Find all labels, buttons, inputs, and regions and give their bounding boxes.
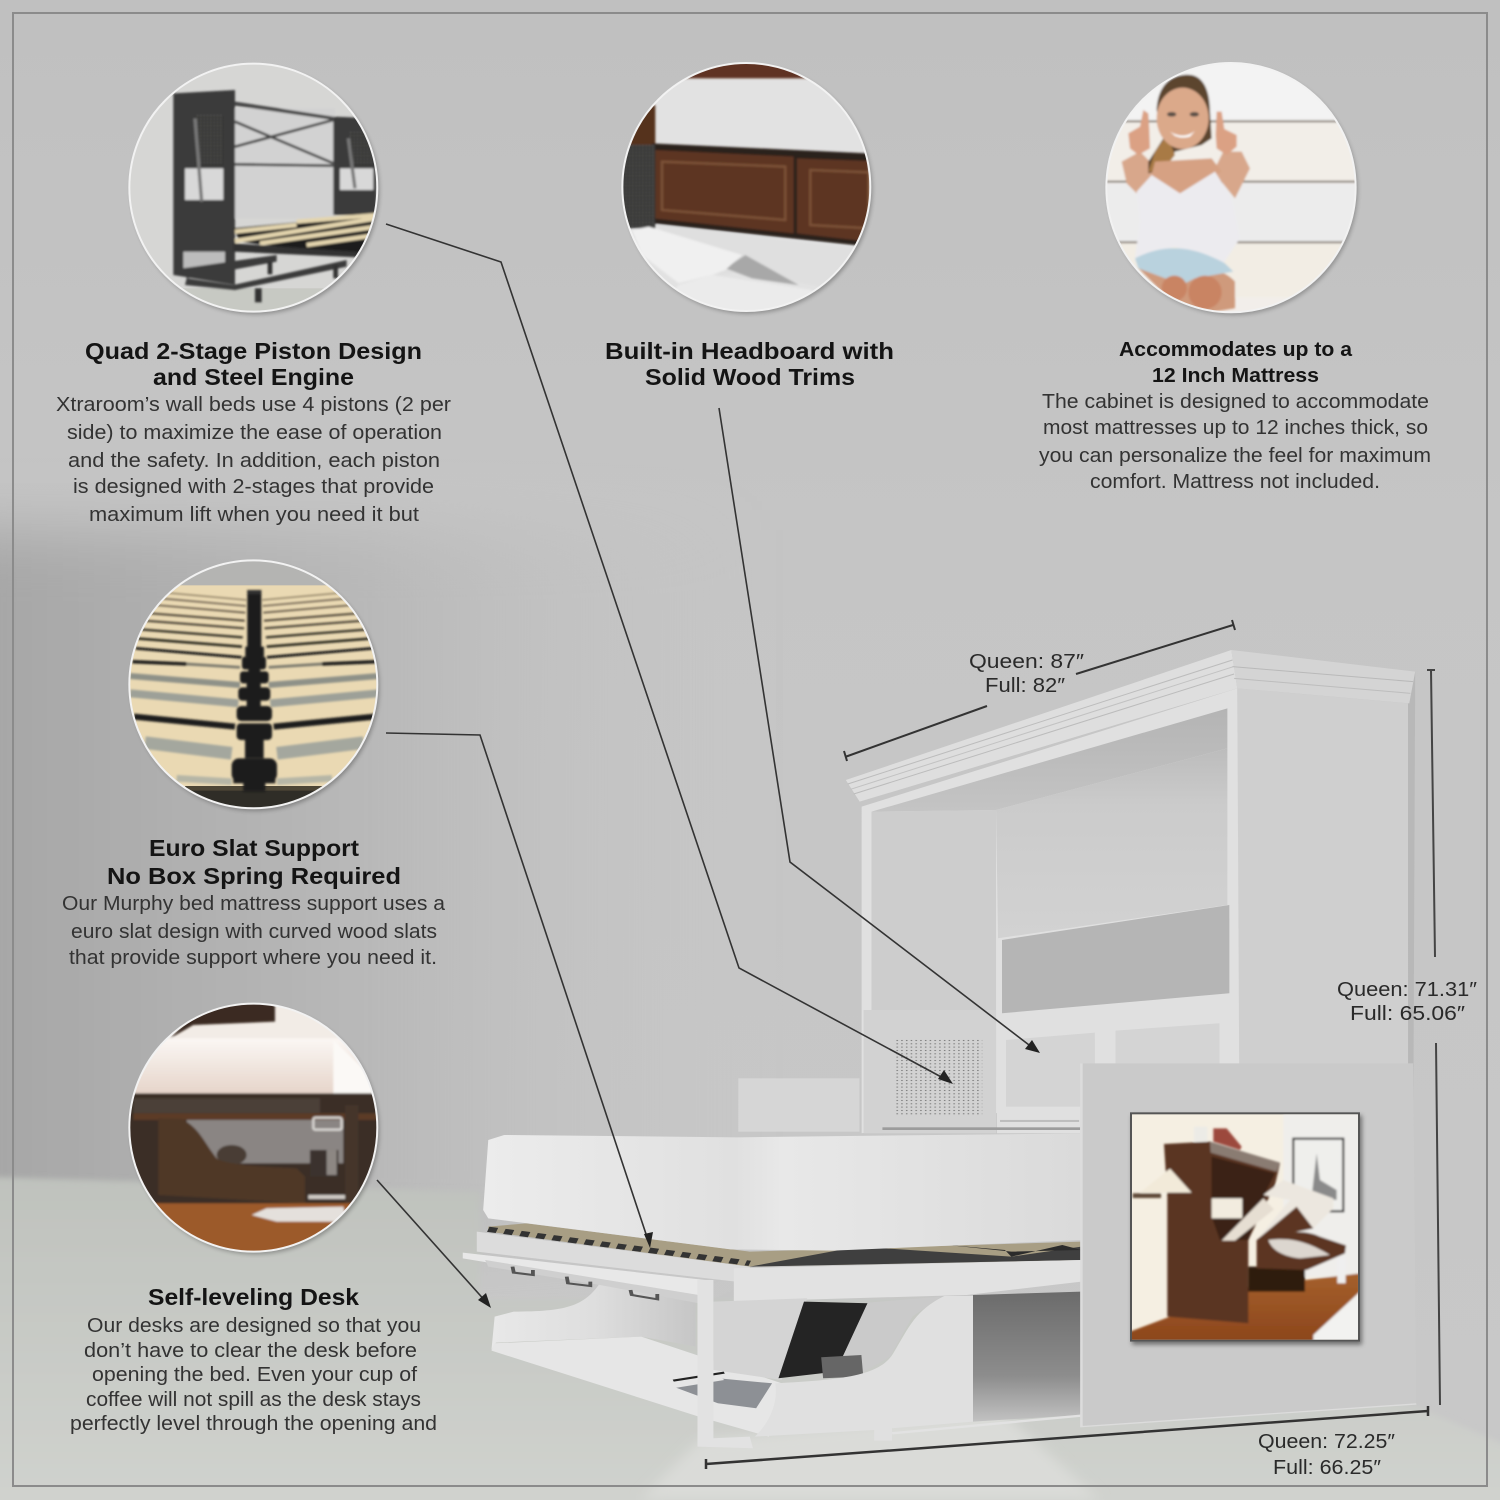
heading: desk: Self-leveling Desk bbox=[148, 1284, 359, 1310]
desk shelf bbox=[491, 1337, 782, 1437]
circle photo: steel engine bbox=[128, 62, 382, 316]
crown moulding bbox=[846, 650, 1237, 802]
text: mattress description: most mattresses up to 12 inches thick, so bbox=[1043, 417, 1428, 439]
feet bbox=[1162, 276, 1187, 301]
dimension label: width bbox=[969, 651, 1084, 697]
text: desk description: opening the bed. Even your cup of bbox=[92, 1364, 417, 1386]
illustration: murphy bed cabinet bbox=[846, 650, 1415, 1143]
circle photo: woman with thumbs up bbox=[1105, 62, 1360, 317]
dimension label: width: Queen: 87″ bbox=[969, 651, 1084, 673]
text: desk description: coffee will not spill as the desk stays bbox=[86, 1389, 421, 1411]
heading: headboard: Built-in Headboard with bbox=[605, 338, 894, 364]
desk near end panel bbox=[755, 1296, 973, 1441]
hands bbox=[1128, 110, 1150, 155]
mattress bbox=[483, 1133, 1081, 1251]
picture frame bbox=[1293, 1139, 1343, 1211]
illustration: bed, mattress and desk bbox=[463, 1063, 1416, 1448]
text: piston description: is designed with 2-stages that provide bbox=[73, 476, 434, 498]
dimension label: depth: Full: 66.25″ bbox=[1273, 1457, 1381, 1479]
heading: piston design: Quad 2-Stage Piston Design bbox=[85, 338, 422, 364]
laptop screen bbox=[778, 1302, 868, 1378]
leader line: headboard to cabinet bbox=[719, 408, 1040, 1053]
perforated panel bbox=[895, 1038, 982, 1115]
front rail bbox=[734, 1260, 1081, 1302]
heading: euro slat: No Box Spring Required bbox=[107, 863, 401, 889]
cabinet right side panel bbox=[1237, 688, 1408, 1077]
text: piston description: side) to maximize the ease of operation bbox=[67, 422, 442, 444]
heading: piston design bbox=[85, 338, 422, 390]
dimension label: height bbox=[1337, 979, 1477, 1025]
circle photo: euro slats bbox=[120, 550, 390, 820]
text: desk description: don’t have to clear the desk before bbox=[84, 1340, 417, 1362]
text: mattress description: The cabinet is designed to accommodate bbox=[1042, 391, 1429, 413]
dark space beneath the bed bbox=[973, 1292, 1081, 1422]
bed flap bbox=[1222, 1198, 1274, 1241]
circle photo: wood headboard bbox=[621, 62, 874, 316]
dimension label: width: Full: 82″ bbox=[985, 675, 1065, 697]
front leg bbox=[697, 1280, 753, 1448]
inset photo: brown cabinet bbox=[1130, 1113, 1360, 1342]
dimension label: height: Full: 65.06″ bbox=[1350, 1003, 1465, 1025]
text: euro slat description: that provide support where you need it. bbox=[69, 947, 437, 969]
rod bbox=[892, 1416, 1081, 1433]
text: mattress description: you can personalize the feel for maximum bbox=[1039, 445, 1431, 467]
slats under mattress bbox=[488, 1223, 1081, 1267]
heading: headboard bbox=[605, 338, 894, 390]
legs bbox=[1138, 268, 1236, 311]
cabinet body bbox=[1164, 1142, 1280, 1323]
mug bbox=[821, 1355, 863, 1378]
white top bbox=[1135, 172, 1240, 263]
desk flap bbox=[463, 1253, 705, 1298]
headboard end bbox=[738, 1078, 859, 1132]
books on top bbox=[1194, 1127, 1207, 1142]
heading: mattress: Accommodates up to a bbox=[1119, 339, 1353, 361]
text: desk description bbox=[70, 1315, 437, 1435]
cabinet opening bbox=[862, 688, 1239, 1133]
text: piston description: maximum lift when you need it but bbox=[89, 504, 419, 526]
shorts bbox=[1135, 248, 1233, 285]
text: mattress description bbox=[1039, 391, 1431, 493]
leader line: desk detail to desk bbox=[377, 1180, 491, 1308]
leader line: euro slat to bed bbox=[386, 733, 653, 1248]
depth dimension line bbox=[706, 1406, 1428, 1469]
hair bbox=[1148, 75, 1212, 173]
slat end caps bbox=[488, 1229, 750, 1263]
doors bbox=[997, 997, 1230, 1133]
desk handles bbox=[513, 1267, 737, 1316]
face bbox=[1157, 88, 1209, 149]
laptop keyboard and tablet bbox=[673, 1378, 772, 1408]
heading: mattress: 12 Inch Mattress bbox=[1152, 365, 1319, 387]
desk bbox=[1257, 1232, 1346, 1270]
text: euro slat description: Our Murphy bed mattress support uses a bbox=[62, 893, 446, 915]
desk far end panel with S-curve bbox=[491, 1283, 696, 1350]
dimension label: height: Queen: 71.31″ bbox=[1337, 979, 1477, 1001]
dimension label: depth bbox=[1258, 1431, 1395, 1479]
dimension label: depth: Queen: 72.25″ bbox=[1258, 1431, 1395, 1453]
inner back wall behind the laptop bbox=[713, 1298, 807, 1380]
arms bbox=[1120, 152, 1154, 194]
lamp bbox=[1140, 1169, 1192, 1193]
top rail bbox=[477, 1232, 750, 1283]
heading: headboard: Solid Wood Trims bbox=[645, 364, 855, 390]
height dimension line bbox=[1427, 670, 1440, 1405]
width dimension line bbox=[844, 620, 1235, 761]
text: euro slat description: euro slat design with curved wood slats bbox=[71, 921, 437, 943]
text: piston description: Xtraroom’s wall beds use 4 pistons (2 per bbox=[56, 394, 451, 416]
chest bbox=[1152, 158, 1222, 195]
heading: mattress bbox=[1119, 339, 1353, 387]
circle photo: self-leveling desk detail bbox=[120, 995, 390, 1265]
text: mattress description: comfort. Mattress not included. bbox=[1090, 471, 1380, 493]
text: piston description: and the safety. In addition, each piston bbox=[68, 450, 440, 472]
heading: euro slat bbox=[107, 835, 401, 889]
leader line: piston to cabinet bbox=[386, 224, 953, 1084]
text: piston description bbox=[56, 394, 451, 526]
heading: piston design: and Steel Engine bbox=[153, 364, 354, 390]
text: desk description: Our desks are designed so that you bbox=[87, 1315, 421, 1337]
text: euro slat description bbox=[62, 893, 446, 969]
heading: euro slat: Euro Slat Support bbox=[149, 835, 359, 861]
under-desk shadow bbox=[1248, 1267, 1305, 1292]
front panel bbox=[1081, 1063, 1416, 1427]
floor bbox=[1130, 1273, 1360, 1342]
text: desk description: perfectly level through the opening and bbox=[70, 1413, 437, 1435]
